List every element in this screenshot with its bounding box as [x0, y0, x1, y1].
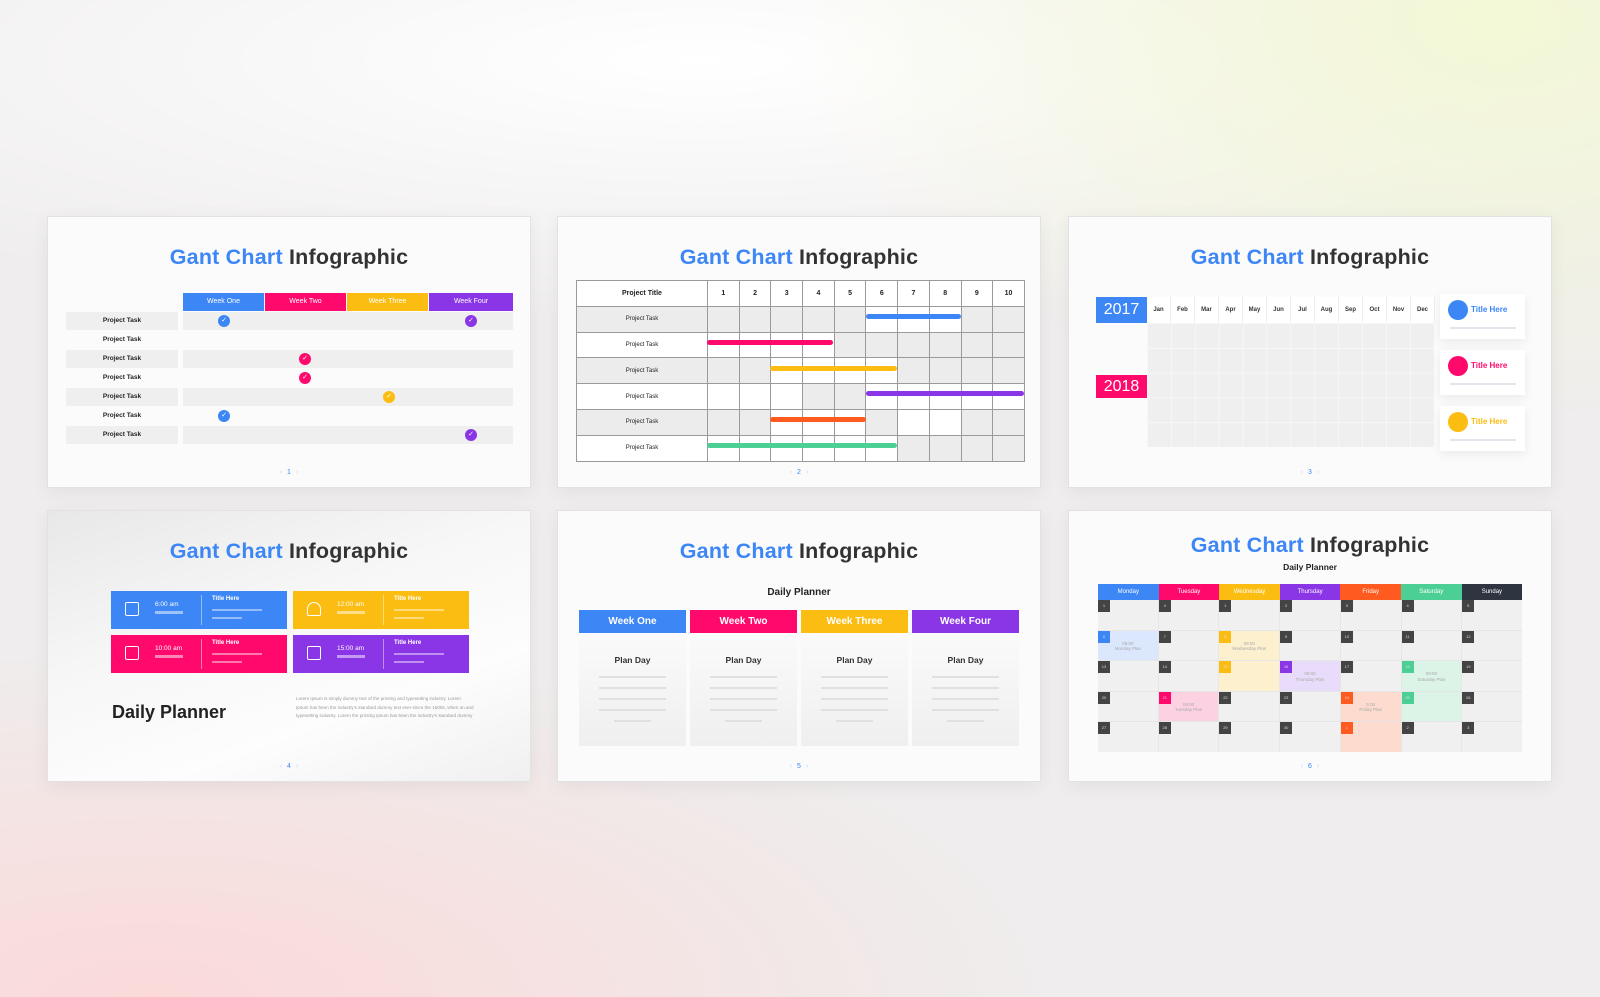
calendar grid: Saturday Plan [1417, 677, 1446, 682]
panel: weekly task checklist [47, 216, 531, 488]
calendar grid: 14 [1162, 664, 1167, 669]
cards [1443, 300, 1522, 454]
calendar grid: 3 [1346, 603, 1348, 608]
title: Gant Chart Infographic [1191, 245, 1429, 269]
card 2: Title Here [1471, 361, 1507, 370]
task rows: ✓ [468, 317, 474, 324]
gantt table: 8 [943, 290, 947, 297]
calendar grid: 18 [1405, 664, 1410, 669]
week headers: Plan Day [837, 655, 872, 665]
task rows: ✓ [221, 412, 227, 419]
tile purple: 15:00 am [337, 645, 364, 652]
gantt table: Project Task [626, 419, 658, 425]
calendar grid: 25 [1405, 695, 1410, 700]
calendar grid: 2 [1285, 603, 1287, 608]
month header: Dec [1417, 307, 1428, 313]
month header: Aug [1321, 307, 1332, 313]
month header: Jan [1153, 307, 1164, 313]
calendar grid: 1 [1103, 603, 1105, 608]
title: Gant Chart Infographic [680, 245, 918, 269]
calendar grid: 8 [1224, 634, 1227, 639]
month header: Feb [1177, 307, 1188, 313]
week header: Week Four [454, 298, 488, 305]
page number: ‹ 3 › [1301, 469, 1319, 476]
panel: daily planner tiles [47, 510, 531, 782]
calendar grid: 23 [1284, 695, 1288, 700]
calendar grid: 26 [1466, 695, 1470, 700]
week headers: Week Four [940, 616, 991, 627]
month header: Oct [1369, 307, 1380, 313]
day headers: Tuesday [1177, 589, 1200, 595]
tile blue: Title Here [212, 596, 239, 602]
month header: Jun [1273, 307, 1284, 313]
calendar grid: 1 [1346, 725, 1348, 730]
gantt table: 1 [721, 290, 725, 297]
week header: Week Two [289, 298, 322, 305]
week headers: Plan Day [615, 655, 650, 665]
calendar grid: 22 [1223, 695, 1228, 700]
page number: ‹ 6 › [1301, 763, 1319, 770]
panel: weekly planner [557, 510, 1041, 782]
calendar grid: Thursday Plan [1295, 677, 1324, 682]
page number: ‹ 1 › [280, 469, 298, 476]
calendar grid: 7 [1164, 634, 1166, 639]
day headers: Thursday [1298, 589, 1323, 595]
calendar grid: 15 [1223, 664, 1228, 669]
page number: ‹ 2 › [790, 469, 808, 476]
title: Gant Chart Infographic [170, 245, 408, 269]
tile yellow: 12:00 am [337, 601, 364, 608]
gantt table: Project Task [626, 445, 658, 451]
calendar grid: 16 [1284, 664, 1288, 669]
calendar grid: 21 [1162, 695, 1167, 700]
task rows: Project Task [103, 355, 141, 362]
day headers: Wednesday [1234, 589, 1265, 595]
calendar grid: 20 [1102, 695, 1106, 700]
week headers: Plan Day [726, 655, 761, 665]
gantt table [576, 280, 1025, 462]
gantt table: Project Title [622, 290, 662, 297]
title: Gant Chart Infographic [170, 539, 408, 563]
tile purple: Title Here [394, 640, 421, 646]
calendar grid: Wednesday Plan [1232, 646, 1266, 651]
heading: daily planner: Daily Planner [112, 702, 226, 722]
gantt table: Project Task [626, 394, 658, 400]
calendar grid: 5:00 [1366, 702, 1375, 707]
calendar grid: 10 [1345, 634, 1349, 639]
week header: Week Three [369, 298, 406, 305]
week headers: Week Two [720, 616, 767, 627]
card 3 [1440, 406, 1525, 451]
calendar grid: 11 [1405, 634, 1410, 639]
tile blue: 6:00 am [155, 601, 178, 608]
calendar grid: 1 [1224, 603, 1227, 608]
tile yellow: Title Here [394, 596, 421, 602]
year 2017: 2017 [1104, 301, 1139, 318]
tile pink [111, 635, 287, 673]
gantt table: 7 [912, 290, 915, 297]
page number: ‹ 4 › [280, 763, 298, 770]
calendar grid: Monday Plan [1115, 646, 1141, 651]
calendar grid: 09:00 [1426, 671, 1437, 676]
calendar grid: 09:00 [1304, 671, 1316, 676]
calendar grid: 28 [1162, 725, 1167, 730]
calendar grid: 09:00 [1122, 641, 1133, 646]
gantt table: 5 [848, 290, 852, 297]
month header: Sep [1345, 307, 1356, 313]
tile pink: Title Here [212, 640, 239, 646]
day headers [1098, 584, 1522, 600]
year 2017 [1096, 297, 1147, 323]
calendar grid: 09:00 [1244, 641, 1255, 646]
month header: Jul [1298, 307, 1307, 313]
task rows: Project Task [103, 317, 141, 324]
card 2 [1440, 350, 1525, 395]
month header: Nov [1393, 307, 1404, 313]
gantt table: 9 [975, 290, 979, 297]
task rows: ✓ [302, 355, 308, 362]
calendar grid: 5 [1467, 603, 1469, 608]
card 3: Title Here [1471, 417, 1507, 426]
week headers: Week One [608, 616, 657, 627]
task rows: ✓ [468, 431, 474, 438]
calendar grid [1098, 600, 1522, 752]
day headers: Saturday [1419, 589, 1443, 595]
month header: Mar [1201, 307, 1212, 313]
subtitle: Daily Planner [1283, 562, 1337, 572]
month header: May [1249, 307, 1260, 313]
task rows: ✓ [386, 393, 392, 400]
day headers: Monday [1118, 589, 1139, 595]
week headers: Week Three [827, 616, 882, 627]
card 1 [1440, 294, 1525, 339]
gantt table: 2 [753, 290, 757, 297]
month header: Apr [1225, 307, 1236, 313]
paragraph: Lorem Ipsum is simply dummy text of the printing and typesetting industry. Lorem Ipsum has been the industry's standard dummy text ever since the 1500s, when an and typesetting industry. Lorem the printing Ipsum has been the industry's standard dummy [296, 696, 474, 718]
gantt table: 10 [1005, 290, 1012, 297]
calendar grid: 17 [1345, 664, 1349, 669]
week header: Week One [207, 298, 240, 305]
task rows: Project Task [103, 336, 141, 343]
task rows: Project Task [103, 393, 141, 400]
month header [1153, 297, 1435, 323]
card 1: Title Here [1471, 305, 1507, 314]
gantt table: Project Task [626, 316, 658, 322]
panel: gantt bar table [557, 216, 1041, 488]
gantt table: 4 [816, 290, 820, 297]
panel: yearly calendar [1068, 216, 1552, 488]
gantt table: 6 [880, 290, 884, 297]
task rows: ✓ [221, 317, 227, 324]
week headers: Plan Day [948, 655, 983, 665]
calendar grid: Tuesday Plan [1175, 707, 1202, 712]
calendar grid: 19 [1466, 664, 1470, 669]
grid [1147, 323, 1434, 447]
tiles [111, 591, 469, 673]
bars [707, 314, 1024, 448]
week header [183, 293, 513, 311]
tile pink: 10:00 am [155, 645, 182, 652]
calendar grid: 27 [1102, 725, 1106, 730]
calendar grid: 4 [1164, 603, 1166, 608]
task rows: Project Task [103, 412, 141, 419]
gantt table: 3 [785, 290, 789, 297]
title: Gant Chart Infographic [1191, 533, 1429, 557]
calendar grid: 3 [1467, 725, 1469, 730]
calendar grid: 4 [1406, 603, 1409, 608]
week headers [579, 610, 1019, 746]
year 2018: 2018 [1104, 378, 1139, 395]
tile yellow [293, 591, 469, 629]
tile blue [111, 591, 287, 629]
title: Gant Chart Infographic [680, 539, 918, 563]
calendar grid: 9 [1285, 634, 1287, 639]
calendar grid: 29 [1223, 725, 1228, 730]
calendar grid: 09:00 [1183, 702, 1194, 707]
task rows: Project Task [103, 431, 141, 438]
tile purple [293, 635, 469, 673]
calendar grid: 12 [1466, 634, 1470, 639]
page number: ‹ 5 › [790, 763, 808, 770]
calendar grid: 2 [1406, 725, 1409, 730]
task rows [66, 312, 513, 444]
calendar grid: 6 [1103, 634, 1105, 639]
panel: monthly calendar [1068, 510, 1552, 782]
gantt table: Project Task [626, 342, 658, 348]
calendar grid: 30 [1284, 725, 1288, 730]
year 2018 [1096, 375, 1147, 398]
day headers: Sunday [1482, 589, 1502, 595]
day headers: Friday [1362, 589, 1379, 595]
subtitle: Daily Planner [767, 587, 831, 598]
task rows: ✓ [302, 374, 308, 381]
gantt table: Project Task [626, 368, 658, 374]
calendar grid: Friday Plan [1359, 707, 1382, 712]
calendar grid: 13 [1102, 664, 1106, 669]
calendar grid: 24 [1345, 695, 1349, 700]
task rows: Project Task [103, 374, 141, 381]
